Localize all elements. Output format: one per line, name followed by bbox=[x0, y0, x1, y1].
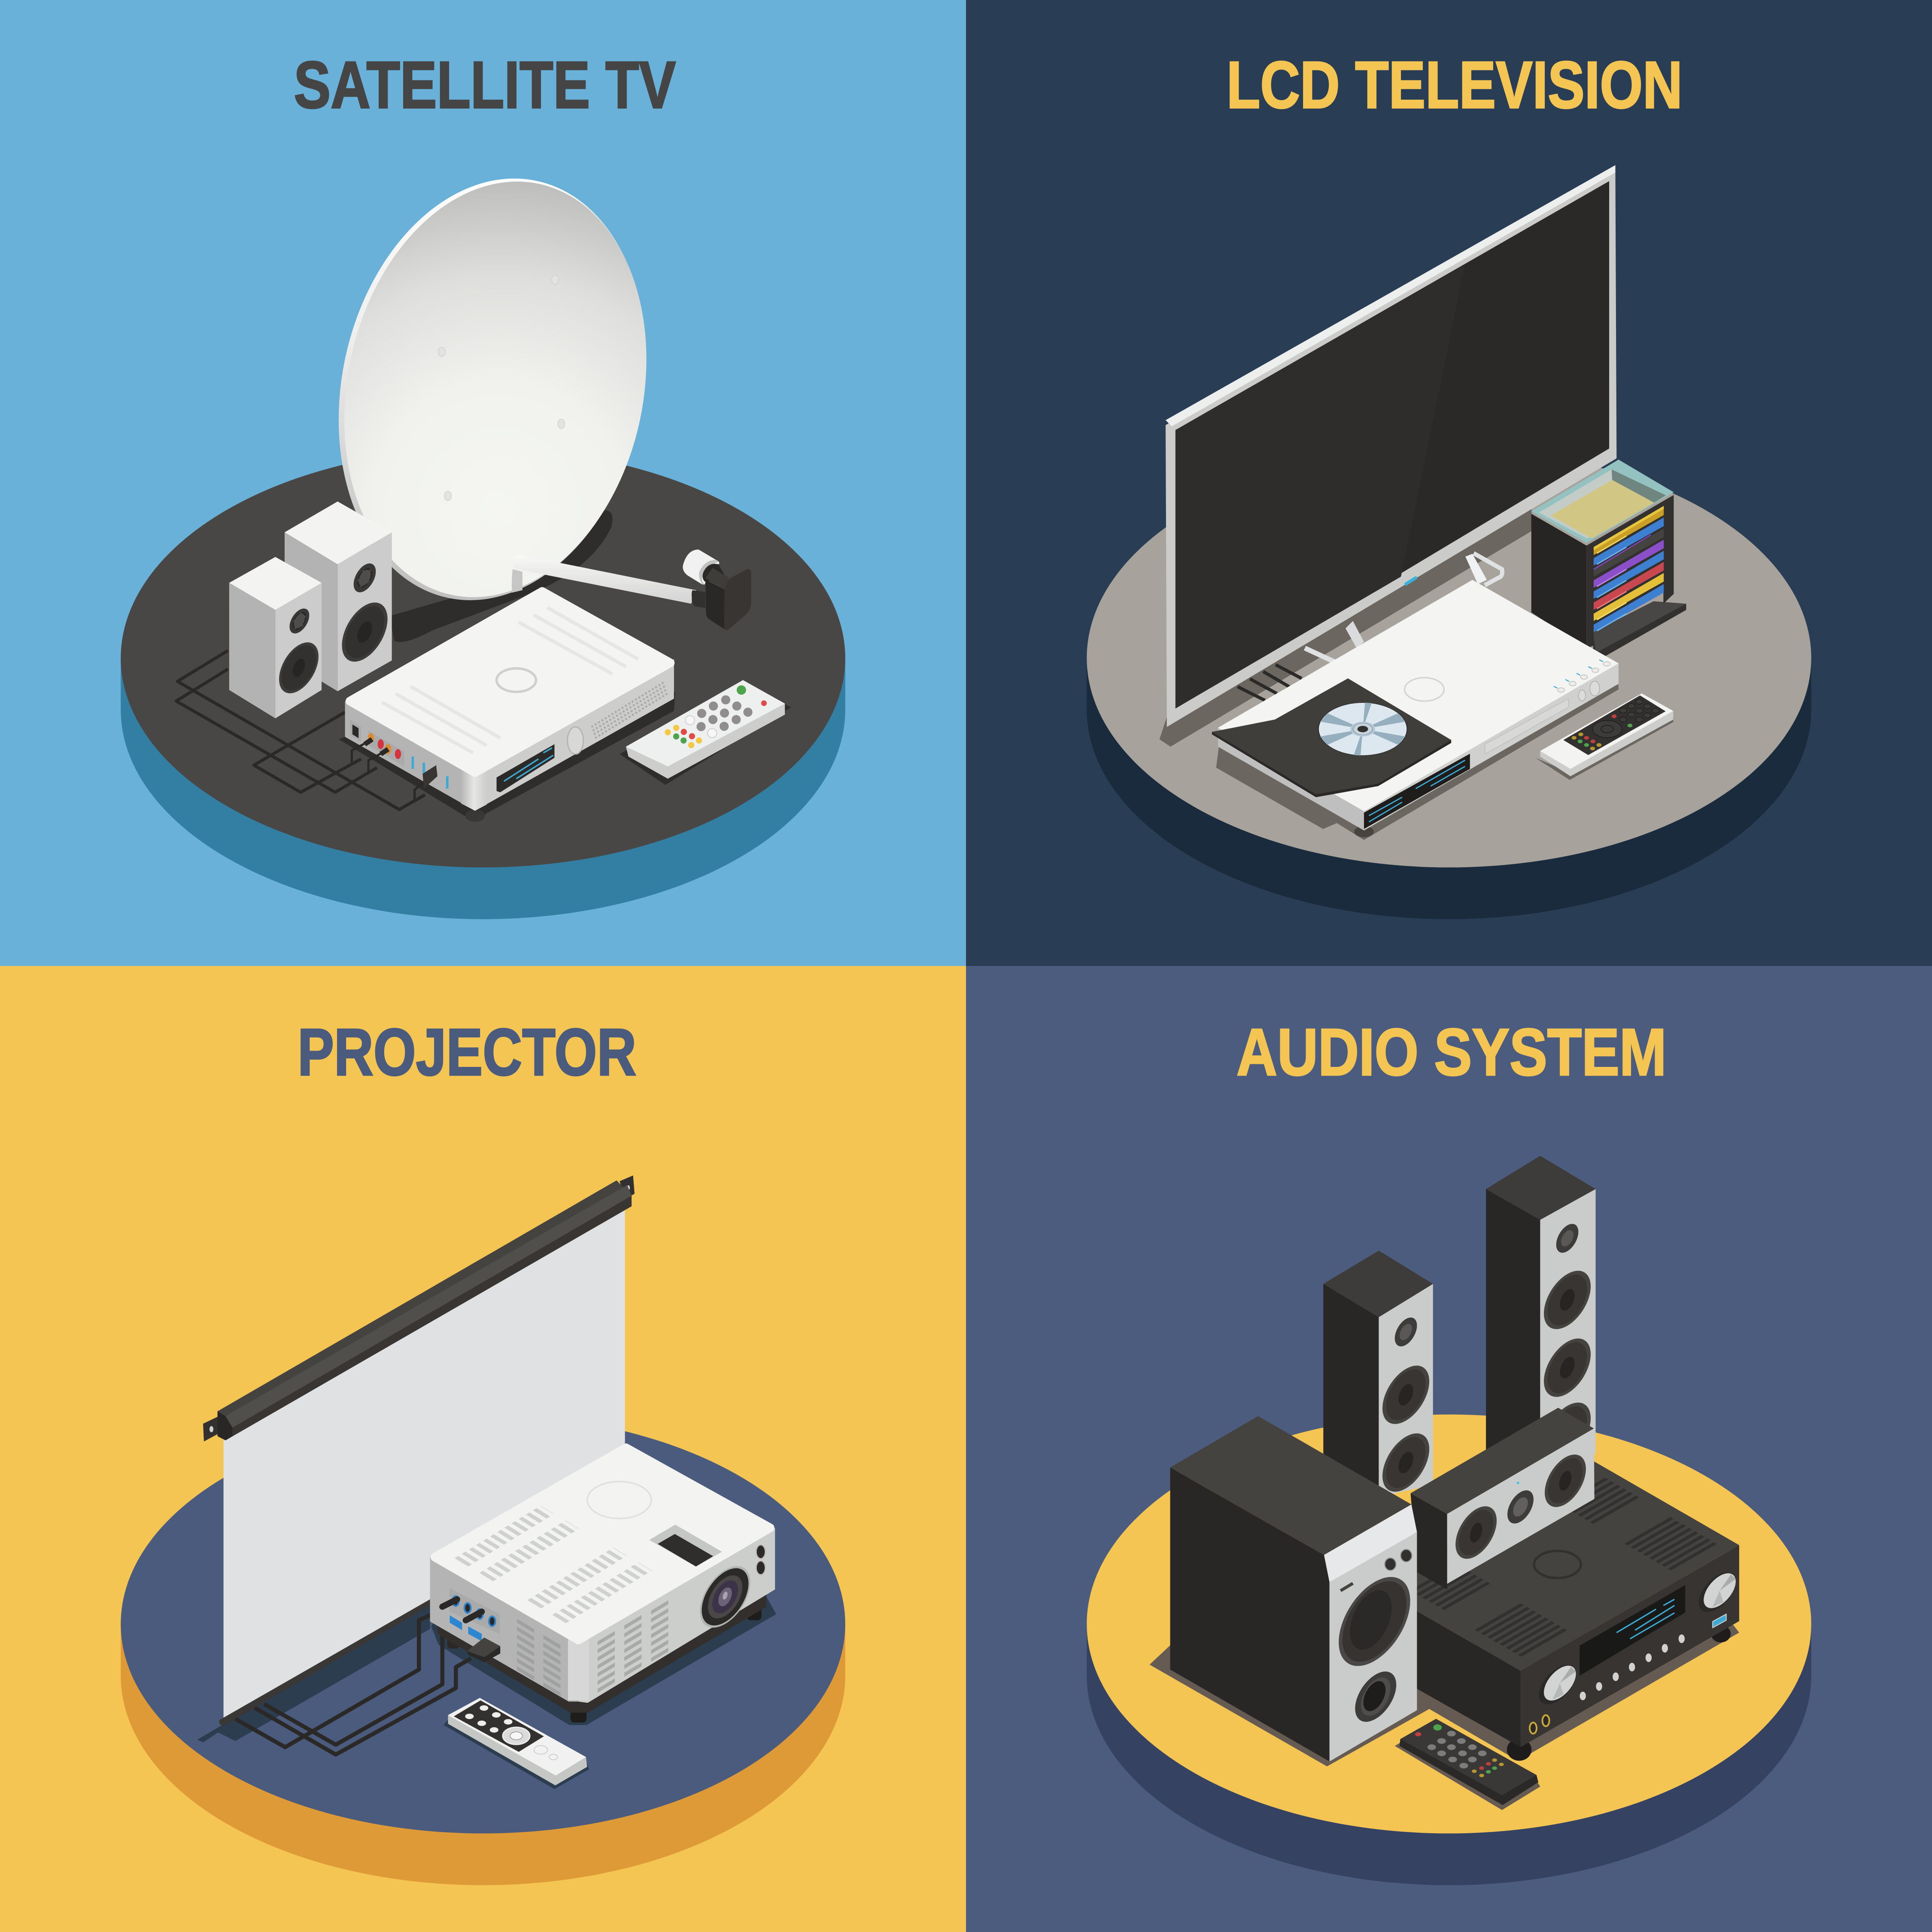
screen bottom bar bbox=[219, 1599, 430, 1726]
heading: projector: PROJECTOR bbox=[298, 1015, 636, 1089]
dvd top buttons bbox=[1558, 662, 1610, 692]
lnb head bbox=[683, 550, 751, 630]
remote control bbox=[1395, 1719, 1540, 1810]
av receiver bbox=[1375, 1461, 1739, 1761]
dvd front display bbox=[1364, 754, 1470, 829]
dvd player shadow bbox=[1216, 677, 1619, 840]
top vents bbox=[1433, 1491, 1696, 1645]
remote control bbox=[620, 680, 791, 785]
lcd tv bbox=[1166, 165, 1616, 727]
center speaker bbox=[1410, 1408, 1595, 1589]
satellite dish bbox=[301, 149, 683, 629]
rear ports bbox=[350, 720, 449, 789]
projector bbox=[430, 1448, 775, 1722]
remote control bbox=[1535, 693, 1673, 780]
side vents bbox=[526, 1605, 660, 1694]
dish mount arm bbox=[512, 555, 696, 604]
heading: satellite tv: SATELLITE TV bbox=[294, 48, 676, 122]
plugs bbox=[442, 1599, 482, 1620]
screen roller bbox=[203, 1176, 635, 1441]
tv logo bbox=[1406, 578, 1416, 584]
floor shadow bbox=[1150, 1614, 1739, 1766]
tv stand legs bbox=[1238, 553, 1502, 700]
port panel bbox=[450, 1588, 500, 1641]
dvd player bbox=[1212, 580, 1619, 837]
platform: yellow disc bbox=[1087, 1415, 1811, 1885]
panel: satellite tv bbox=[0, 0, 966, 966]
compact disc bbox=[1318, 702, 1407, 756]
tv floor shadow bbox=[1160, 499, 1531, 747]
panel: projector bbox=[0, 966, 966, 1932]
heading: audio system: AUDIO SYSTEM bbox=[1236, 1015, 1667, 1089]
top window bbox=[649, 1525, 722, 1567]
panel: lcd television bbox=[966, 0, 1932, 966]
receiver shadow bbox=[339, 653, 675, 822]
speaker wires bbox=[176, 650, 425, 810]
left tower speaker bbox=[1323, 1251, 1433, 1502]
projector shadow bbox=[431, 1597, 776, 1725]
platform: dark disc bbox=[121, 449, 845, 919]
rear speaker bbox=[285, 501, 392, 691]
front speaker bbox=[229, 557, 322, 718]
plugs and cables bbox=[352, 739, 437, 800]
top vents bbox=[462, 1510, 645, 1619]
panel: audio system bbox=[966, 966, 1932, 1932]
lens bbox=[700, 1555, 750, 1638]
receiver knobs bbox=[1539, 1657, 1576, 1712]
heading: lcd television: LCD TELEVISION bbox=[1227, 48, 1683, 122]
set top receiver box bbox=[345, 592, 674, 822]
screen reflection bbox=[1176, 265, 1465, 708]
disc rack bbox=[1531, 459, 1686, 657]
disc tray bbox=[1212, 678, 1451, 797]
platform: grey disc bbox=[1087, 449, 1811, 919]
receiver display bbox=[497, 744, 554, 792]
usb port bbox=[1713, 1614, 1726, 1628]
receiver display bbox=[1580, 1585, 1685, 1676]
projection screen bbox=[203, 1176, 635, 1726]
platform: navy disc bbox=[121, 1415, 845, 1885]
dish shadow bbox=[389, 510, 613, 642]
glass top bbox=[1531, 459, 1674, 543]
vent slots on receiver bbox=[382, 608, 638, 753]
cables bbox=[235, 1608, 471, 1755]
right tower speaker bbox=[1486, 1156, 1596, 1471]
gold jacks bbox=[1530, 1715, 1549, 1734]
receiver grille bbox=[592, 681, 669, 738]
subwoofer bbox=[1170, 1416, 1417, 1762]
small buttons bbox=[1580, 1634, 1685, 1700]
disc cases bbox=[1594, 506, 1664, 632]
screen floor shadow bbox=[197, 1604, 430, 1742]
dvd slot bbox=[1485, 699, 1568, 754]
remote control bbox=[444, 1698, 589, 1789]
